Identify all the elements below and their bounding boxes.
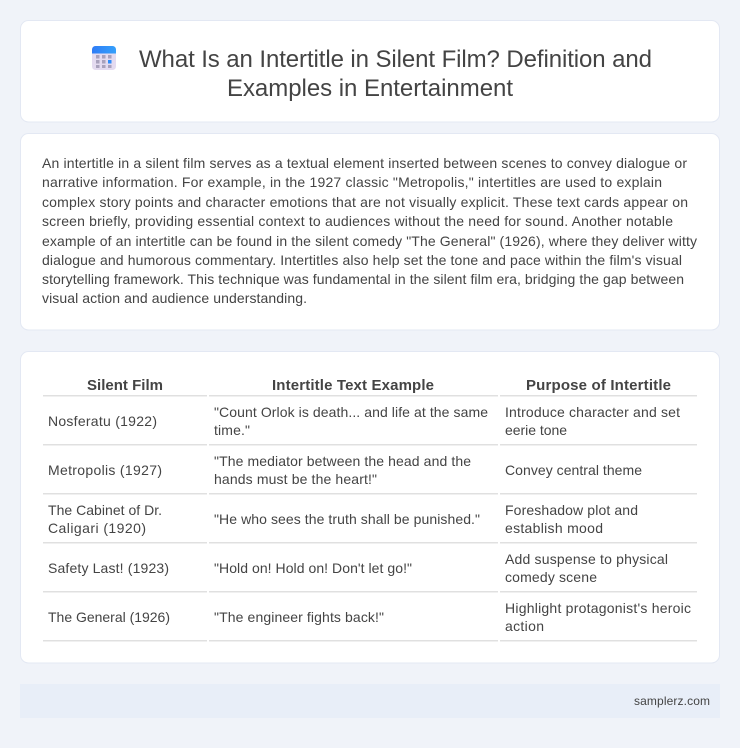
table row: The Cabinet of Dr. Caligari: "He who sees the truth shall be punished." bbox=[214, 511, 480, 527]
text block: definition paragraph: screen briefly, providing essential context to audiences without the need for sound. Another notable bbox=[42, 213, 673, 229]
table row: Safety Last! bbox=[48, 551, 668, 585]
table row: Safety Last!: "Hold on! Hold on! Don't let go!" bbox=[214, 560, 412, 576]
title bbox=[139, 46, 652, 102]
table row: Safety Last!: Add suspense to physical bbox=[505, 551, 668, 567]
table row: The General: action bbox=[505, 618, 544, 634]
table row: The General: The General (1926) bbox=[48, 609, 170, 625]
table row: Metropolis: hands must be the heart!" bbox=[214, 471, 377, 487]
table row: Nosferatu: time." bbox=[214, 422, 250, 438]
table row: Nosferatu bbox=[48, 404, 680, 438]
table row: Metropolis bbox=[48, 453, 642, 487]
text block: definition paragraph: dialogue and humorous commentary. Intertitles also help set the tone and pace within the film's visual bbox=[42, 252, 682, 268]
table row: The General: "The engineer fights back!" bbox=[214, 609, 384, 625]
footer source text: samplerz.com bbox=[634, 694, 710, 708]
table row: Safety Last!: Safety Last! (1923) bbox=[48, 560, 169, 576]
table row: Nosferatu: Nosferatu (1922) bbox=[48, 413, 157, 429]
table row: The Cabinet of Dr. Caligari: Caligari (1920) bbox=[48, 520, 146, 536]
table header bbox=[87, 377, 671, 394]
icon: calendar bbox=[92, 46, 116, 70]
panel: table bbox=[20, 352, 720, 663]
text block: definition paragraph: An intertitle in a silent film serves as a textual element inserted between scenes to convey dialogue or bbox=[42, 155, 687, 171]
panel: definition text bbox=[20, 134, 720, 330]
title: Examples in Entertainment bbox=[227, 75, 513, 102]
footer bar bbox=[20, 684, 720, 718]
table row: Metropolis: "The mediator between the head and the bbox=[214, 453, 471, 469]
table row: Nosferatu: Introduce character and set bbox=[505, 404, 680, 420]
text block: definition paragraph: narrative information. For example, in the 1927 classic "Metropolis," intertitles are used to explain bbox=[42, 174, 662, 190]
title: What Is an Intertitle in Silent Film? Definition and bbox=[139, 46, 652, 73]
table row: The General bbox=[48, 600, 691, 634]
table row: Metropolis: Metropolis (1927) bbox=[48, 462, 162, 478]
table row: Nosferatu: "Count Orlok is death... and life at the same bbox=[214, 404, 488, 420]
text block: definition paragraph: visual action and audience understanding. bbox=[42, 290, 307, 306]
table row: The General: Highlight protagonist's heroic bbox=[505, 600, 691, 616]
table header: Purpose of Intertitle bbox=[526, 377, 671, 394]
table row: The Cabinet of Dr. Caligari: Foreshadow plot and bbox=[505, 502, 638, 518]
table header: Silent Film bbox=[87, 377, 163, 394]
table row: The Cabinet of Dr. Caligari: The Cabinet of Dr. bbox=[48, 502, 162, 518]
table row: The Cabinet of Dr. Caligari: establish mood bbox=[505, 520, 603, 536]
table row: Safety Last!: comedy scene bbox=[505, 569, 597, 585]
text block: definition paragraph bbox=[42, 155, 697, 306]
table header: Intertitle Text Example bbox=[272, 377, 434, 394]
text block: definition paragraph: example of an intertitle can be found in the silent comedy "The General" (1926), where they deliver witty bbox=[42, 233, 697, 249]
table row: The Cabinet of Dr. Caligari bbox=[48, 502, 638, 536]
text block: definition paragraph: storytelling framework. This technique was fundamental in the silent film era, bridging the gap between bbox=[42, 271, 684, 287]
table rules bbox=[43, 395, 697, 642]
panel: title card bbox=[20, 20, 720, 122]
table row: Metropolis: Convey central theme bbox=[505, 462, 642, 478]
table row: Nosferatu: eerie tone bbox=[505, 422, 567, 438]
text block: definition paragraph: complex story points and character emotions that are not visually explicit. These text cards appear on bbox=[42, 194, 688, 210]
